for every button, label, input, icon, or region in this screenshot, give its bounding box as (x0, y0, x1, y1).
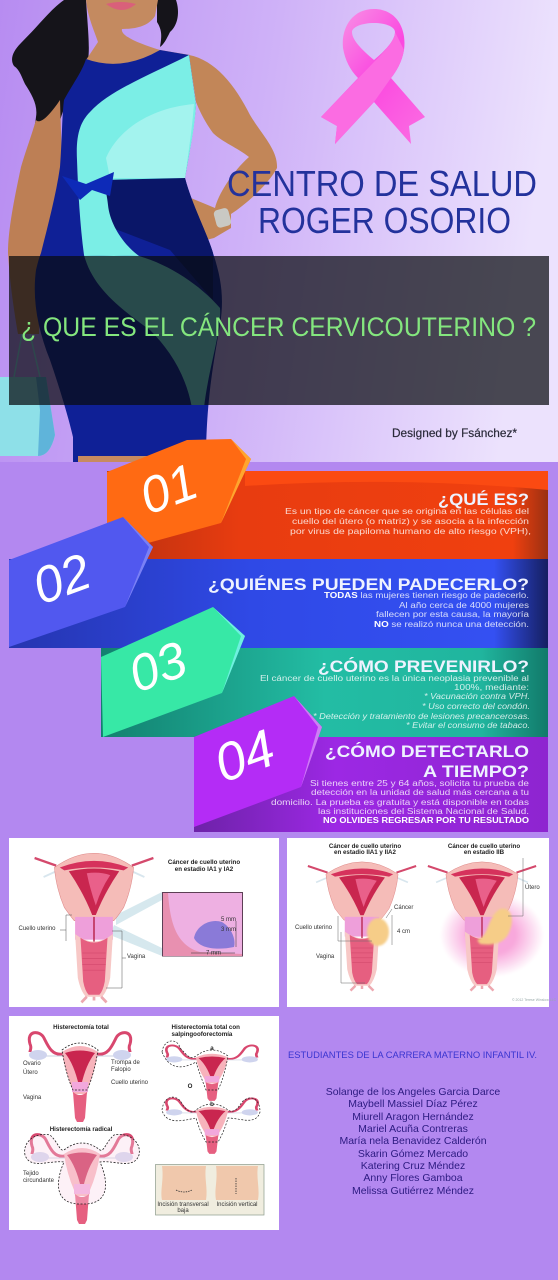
tag edge (294, 696, 322, 787)
body text: Si tienes entre 25 y 64 años, solicita tu prueba de (310, 779, 530, 788)
body text: Al año cerca de 4000 mujeres (399, 601, 529, 610)
copyright: © 2012 Terese Winslow LLC (512, 998, 557, 1002)
radical hysterectomy heading: Histerectomía radical (50, 1126, 113, 1133)
panel: ¿Cómo prevenirlo? (101, 607, 548, 737)
number 01: 01 (132, 452, 205, 525)
body text: cuello del útero (o matriz) y se asocia a la infección (292, 517, 529, 526)
heading: A TIEMPO? (423, 762, 529, 781)
radical outline (25, 1134, 139, 1204)
body text: 100%, mediante: (454, 683, 529, 692)
lower teal sweep (84, 255, 220, 408)
far arm (8, 100, 62, 334)
heading A (329, 843, 401, 856)
dark banner (9, 256, 549, 405)
heading (168, 859, 240, 873)
blue tag (9, 517, 153, 647)
hair right (157, 0, 178, 47)
labels: Ovario (23, 1061, 41, 1067)
labels: 4 cm (397, 929, 410, 935)
body text: NO OLVIDES REGRESAR POR TU RESULTADO (323, 816, 529, 825)
heading (325, 742, 529, 781)
purple band (194, 737, 548, 832)
number 03: 03 (121, 630, 194, 703)
total hysterectomy heading: Histerectomía total (53, 1024, 109, 1031)
panel: ¿Quiénes pueden padecerlo? (9, 517, 548, 648)
body text (324, 591, 530, 629)
outline a (162, 1041, 228, 1090)
tumour A (367, 918, 389, 946)
option letters: O (188, 1083, 193, 1090)
heading: students: ESTUDIANTES DE LA CARRERA MATERNO INFANTIL IV. (288, 1050, 537, 1061)
inset: incisions (156, 1164, 264, 1215)
heading: ¿QUIÉNES PUEDEN PADECERLO? (208, 575, 529, 594)
body text: TODAS las mujeres tienen riesgo de padecerlo. (324, 591, 529, 600)
heading: salpingo-oophorectomy: Histerectomía total con (172, 1024, 240, 1031)
purple tag (194, 696, 322, 827)
navy hem cover (73, 405, 206, 462)
student names: Melissa Gutiérrez Méndez (352, 1185, 474, 1197)
option letters: a (210, 1045, 214, 1052)
panel: ¿Qué es? (107, 439, 548, 560)
body text (271, 779, 530, 825)
panel: uterus diagrams stage IIA and IIB (287, 838, 557, 1007)
labels: Útero (525, 884, 540, 891)
handbag (0, 377, 55, 456)
inset: tumour detail: 5 mm (221, 917, 236, 923)
total hysterectomy uterus (29, 1033, 131, 1122)
label: Vagina (127, 954, 146, 960)
cervix bracket (60, 915, 126, 988)
label: Cuello uterino (18, 926, 56, 932)
heading: salpingo-oophorectomy: salpingooforectomía (172, 1031, 233, 1038)
labels: Vagina (23, 1095, 42, 1101)
body text (285, 507, 531, 536)
green tag (101, 607, 245, 737)
body text: * Detección y tratamiento de lesiones precancerosas. (313, 712, 530, 721)
labels: Cuello uterino (111, 1080, 149, 1086)
total hysterectomy outline (62, 1043, 98, 1090)
student names: Solange de los Angeles Garcia Darce (326, 1086, 500, 1098)
dress (35, 50, 222, 462)
tag edge (213, 607, 245, 693)
panel: ¿Cómo detectarlo a tiempo? (194, 696, 548, 832)
option letters (188, 1045, 214, 1108)
title: Centro de Salud Roger Osorio (227, 163, 537, 241)
labels: Tejido (23, 1171, 39, 1177)
heading A: en estadio IIA1 y IIA2 (334, 849, 397, 856)
body text: * Evitar el consumo de tabaco. (406, 721, 530, 730)
white card (287, 838, 549, 1007)
number 02: 02 (25, 542, 98, 615)
labels (295, 884, 540, 960)
tag edge (221, 439, 251, 523)
tag edge (123, 517, 153, 607)
body text: las instituciones del Sistema Nacional de Salud. (318, 807, 529, 816)
heading: ¿CÓMO DETECTARLO (325, 742, 529, 761)
inset: incisions: Incisión vertical (216, 1202, 258, 1208)
light beams to inset (110, 892, 162, 956)
heading A: Cáncer de cuello uterino (329, 843, 401, 850)
red band (107, 471, 548, 559)
option letters: b (210, 1101, 214, 1108)
orange tag (107, 439, 251, 560)
student names: Mariel Acuña Contreras (358, 1123, 468, 1135)
handbag shade (36, 377, 55, 456)
heading B: en estadio IIB (464, 849, 505, 856)
labels: circundante (23, 1178, 55, 1184)
band highlight (245, 471, 548, 490)
inset: tumour detail (162, 892, 242, 956)
panel: uterus diagram stage IA (9, 838, 279, 1007)
uterus A (308, 862, 416, 991)
inset: tumour detail: 3 mm (221, 927, 236, 933)
heading: Cáncer de cuello uterino (168, 859, 240, 866)
lips (106, 2, 136, 10)
handbag handle (14, 334, 40, 377)
panel: hysterectomy diagrams (9, 1016, 279, 1230)
uterus (35, 853, 153, 1002)
body text: NO se realizó nunca una detección. (374, 620, 529, 629)
tumour B (477, 909, 512, 944)
heading B: Cáncer de cuello uterino (448, 843, 520, 850)
neck and face (86, 0, 190, 70)
number 04: 04 (207, 719, 283, 794)
student names: Maybell Massiel Díaz Pérez (348, 1098, 478, 1110)
labels: Vagina (316, 954, 335, 960)
student names: Katering Cruz Méndez (361, 1160, 465, 1172)
body text: El cáncer de cuello uterino es la única neoplasia prevenible al (260, 674, 529, 683)
student names: María nela Benavidez Calderón (339, 1135, 487, 1147)
student names: Skarin Gómez Mercado (358, 1148, 468, 1160)
labels: Trompa de (111, 1060, 140, 1066)
white card (9, 1016, 279, 1230)
radical uterus (31, 1135, 133, 1224)
inset: tumour detail: 7 mm (206, 950, 221, 956)
bow (62, 172, 114, 200)
body text: por virus de papiloma humano de alto riesgo (VPH), (290, 527, 531, 536)
leader lines (338, 858, 523, 983)
heading B (448, 843, 520, 856)
outline b (162, 1097, 260, 1142)
heading: salpingo-oophorectomy (172, 1024, 240, 1038)
student names: Anny Flores Gamboa (363, 1172, 463, 1184)
near arm and hand (160, 55, 277, 244)
teal band (101, 648, 548, 737)
student names (326, 1086, 500, 1197)
labels: Cuello uterino (295, 925, 333, 931)
uterus a (166, 1045, 258, 1101)
spread glow (440, 893, 544, 977)
heading: ¿CÓMO PREVENIRLO? (318, 657, 529, 676)
teal dress panel (77, 55, 196, 256)
illustration: woman in blue and teal dress (0, 0, 277, 462)
labels: Falopio (111, 1067, 131, 1073)
labels: Útero (23, 1069, 38, 1076)
title: Centro de Salud Roger Osorio: ROGER OSORIO (258, 200, 511, 241)
teal highlight (106, 104, 194, 178)
header background (0, 0, 558, 462)
student names: Miurell Aragon Hernández (352, 1111, 474, 1123)
body text: * Uso correcto del condón. (422, 702, 530, 711)
heading: en estadio IA1 y IA2 (175, 866, 234, 873)
body text (260, 674, 530, 730)
labels: Cáncer (394, 905, 413, 911)
inset: incisions: Incisión transversal (157, 1202, 209, 1208)
body text: fallecen por esta causa, la mayoría (376, 610, 530, 619)
body text: domicilio. La prueba es gratuita y está disponible en todas (271, 798, 529, 807)
heading: ¿QUÉ ES? (438, 490, 529, 509)
uterus b (166, 1098, 258, 1154)
blue band (9, 559, 548, 648)
icon: pink awareness ribbon (321, 9, 425, 144)
hair left (12, 0, 89, 160)
dress lower shading (103, 178, 213, 300)
designer credit: Designed by Fsánchez* (392, 426, 517, 440)
watch (213, 207, 232, 229)
labels (23, 1060, 149, 1184)
white card (9, 838, 279, 1007)
body text: * Vacunación contra VPH. (424, 692, 530, 701)
body text: detección en la unidad de salud más cercana a tu (311, 788, 529, 797)
body text: Es un tipo de cáncer que se origina en las células del (285, 507, 529, 516)
inset: incisions: baja (177, 1208, 189, 1214)
leg (78, 456, 148, 462)
uterus B (428, 862, 536, 991)
